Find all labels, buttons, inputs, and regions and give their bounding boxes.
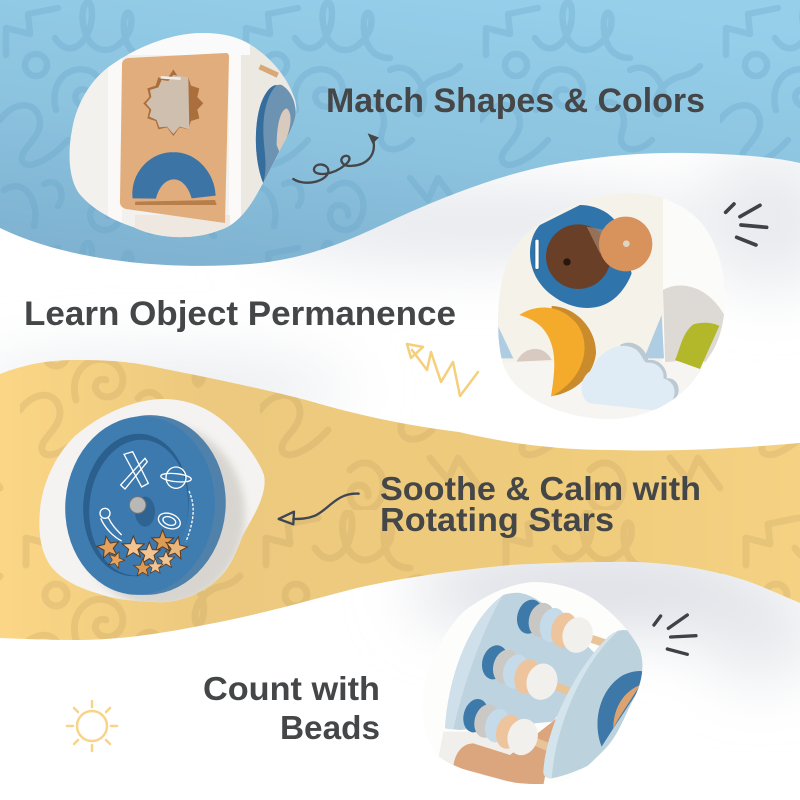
icon: spark lines bottom right [654, 615, 696, 654]
front arch [543, 630, 643, 778]
blue rainbow arch piece [135, 200, 217, 205]
heading: match shapes: Match Shapes & Colors [326, 82, 705, 120]
heading: count with beads [203, 670, 380, 746]
heading: count with beads: Count with [203, 670, 380, 707]
photo: rocket with moon and cloud [498, 193, 724, 419]
cloud [620, 343, 679, 411]
blue top band with pattern [0, 0, 800, 266]
yellow middle band with pattern [0, 360, 800, 640]
wooden stars [95, 530, 189, 576]
wooden board [120, 53, 229, 223]
ring on the side of the toy [256, 64, 296, 183]
back arch [445, 593, 597, 730]
soft grey shading of the white bands [0, 150, 800, 680]
star shaped hole [143, 69, 203, 136]
icon: sun [67, 701, 117, 751]
rods [535, 635, 606, 750]
beads [460, 597, 597, 759]
disc rim [134, 415, 226, 595]
blue plate [530, 205, 632, 308]
heading: soothe and calm: Soothe & Calm with [380, 470, 701, 507]
heading: soothe and calm [380, 470, 701, 538]
centre bolt [135, 497, 155, 527]
space icons [100, 452, 193, 542]
heading: soothe and calm: Rotating Stars [380, 501, 614, 538]
photo: abacus beads [438, 582, 642, 784]
blue fins [498, 315, 664, 358]
base and wood floor [439, 732, 544, 784]
yellow moon [552, 306, 596, 396]
arrow: curly up arrow [293, 134, 378, 183]
photo: rotating stars wheel [30, 395, 270, 607]
photo: shape sorter panel [70, 33, 296, 238]
green shape [675, 323, 719, 369]
wall shadow [663, 286, 724, 362]
wooden disc [599, 217, 652, 271]
icon: spark lines top right [726, 204, 767, 245]
heading: learn object permanence: Learn Object Permanence [24, 295, 456, 333]
heading: count with beads: Beads [280, 709, 380, 746]
icon: yellow zigzag arrow [407, 344, 478, 396]
arrow: pointing left to wheel [279, 494, 359, 524]
